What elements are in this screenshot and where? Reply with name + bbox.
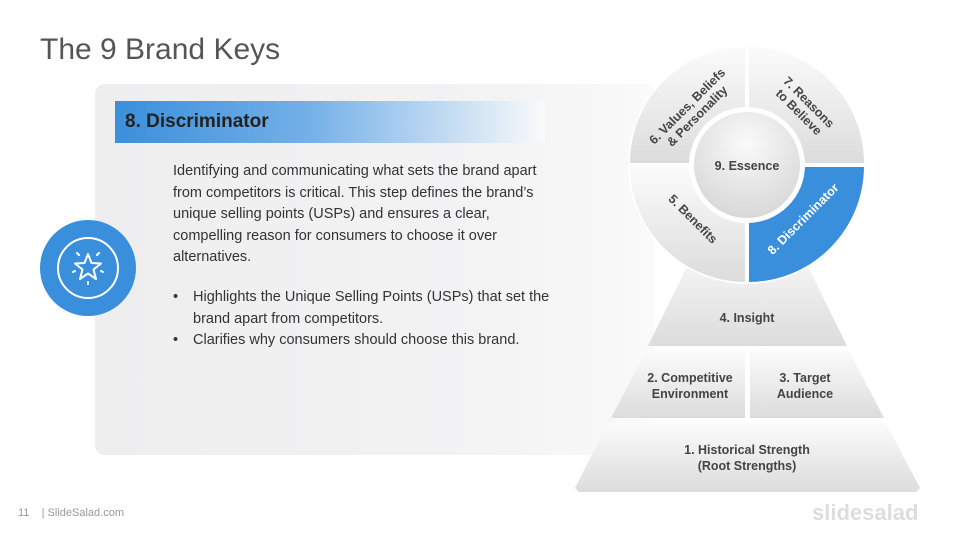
bullet list: Highlights the Unique Selling Points (USPs) that set the brand apart from competitors. bbox=[193, 289, 549, 326]
heading bar bbox=[115, 101, 545, 143]
icon: star badge bbox=[40, 220, 136, 316]
tier 2: 2. Competitive bbox=[647, 371, 733, 385]
segment 6: 6. Values, Beliefs bbox=[647, 65, 728, 147]
panel: content bbox=[95, 84, 655, 455]
bullet list: • bbox=[173, 289, 178, 305]
segment 5 bbox=[630, 167, 745, 282]
segment 7: 7. Reasons bbox=[780, 74, 837, 131]
center essence: 9. Essence bbox=[715, 159, 779, 173]
tier 3: Audience bbox=[777, 387, 833, 401]
text block: description: Identifying and communicating what sets the brand apart from competitors is critical. This step defines the brand’s unique selling points (USPs) and ensures a clear, compelling reason for consumers to choose it over alternatives. bbox=[173, 163, 537, 265]
tier 2: Environment bbox=[652, 387, 729, 401]
footer: 11 | SlideSalad.com bbox=[18, 507, 124, 519]
bullet list: • bbox=[173, 332, 178, 348]
segment 6: & Personality bbox=[664, 83, 730, 149]
segment 5: 5. Benefits bbox=[666, 192, 720, 247]
segment 7 bbox=[749, 47, 864, 163]
heading bar: 8. Discriminator bbox=[125, 111, 269, 132]
segment 6 bbox=[630, 47, 745, 163]
tier 4 insight bbox=[648, 240, 847, 346]
tier 1: 1. Historical Strength bbox=[684, 443, 810, 457]
title: The 9 Brand Keys bbox=[40, 33, 280, 66]
tier 2 bbox=[611, 351, 745, 418]
logo: slidesalad bbox=[812, 500, 918, 525]
segment 8 highlighted: 8. Discriminator bbox=[765, 181, 842, 258]
center essence bbox=[689, 107, 805, 223]
tier 3 bbox=[750, 351, 884, 418]
segment 7: to Believe bbox=[773, 86, 825, 138]
tier 4 insight: 4. Insight bbox=[720, 311, 775, 325]
tier 1: (Root Strengths) bbox=[698, 459, 796, 473]
bullet list bbox=[173, 289, 549, 348]
tier 3: 3. Target bbox=[779, 371, 831, 385]
segment 8 highlighted bbox=[749, 167, 864, 282]
tier 1 bbox=[575, 423, 920, 492]
ring background bbox=[628, 46, 866, 284]
bullet list: Clarifies why consumers should choose this brand. bbox=[193, 332, 519, 348]
